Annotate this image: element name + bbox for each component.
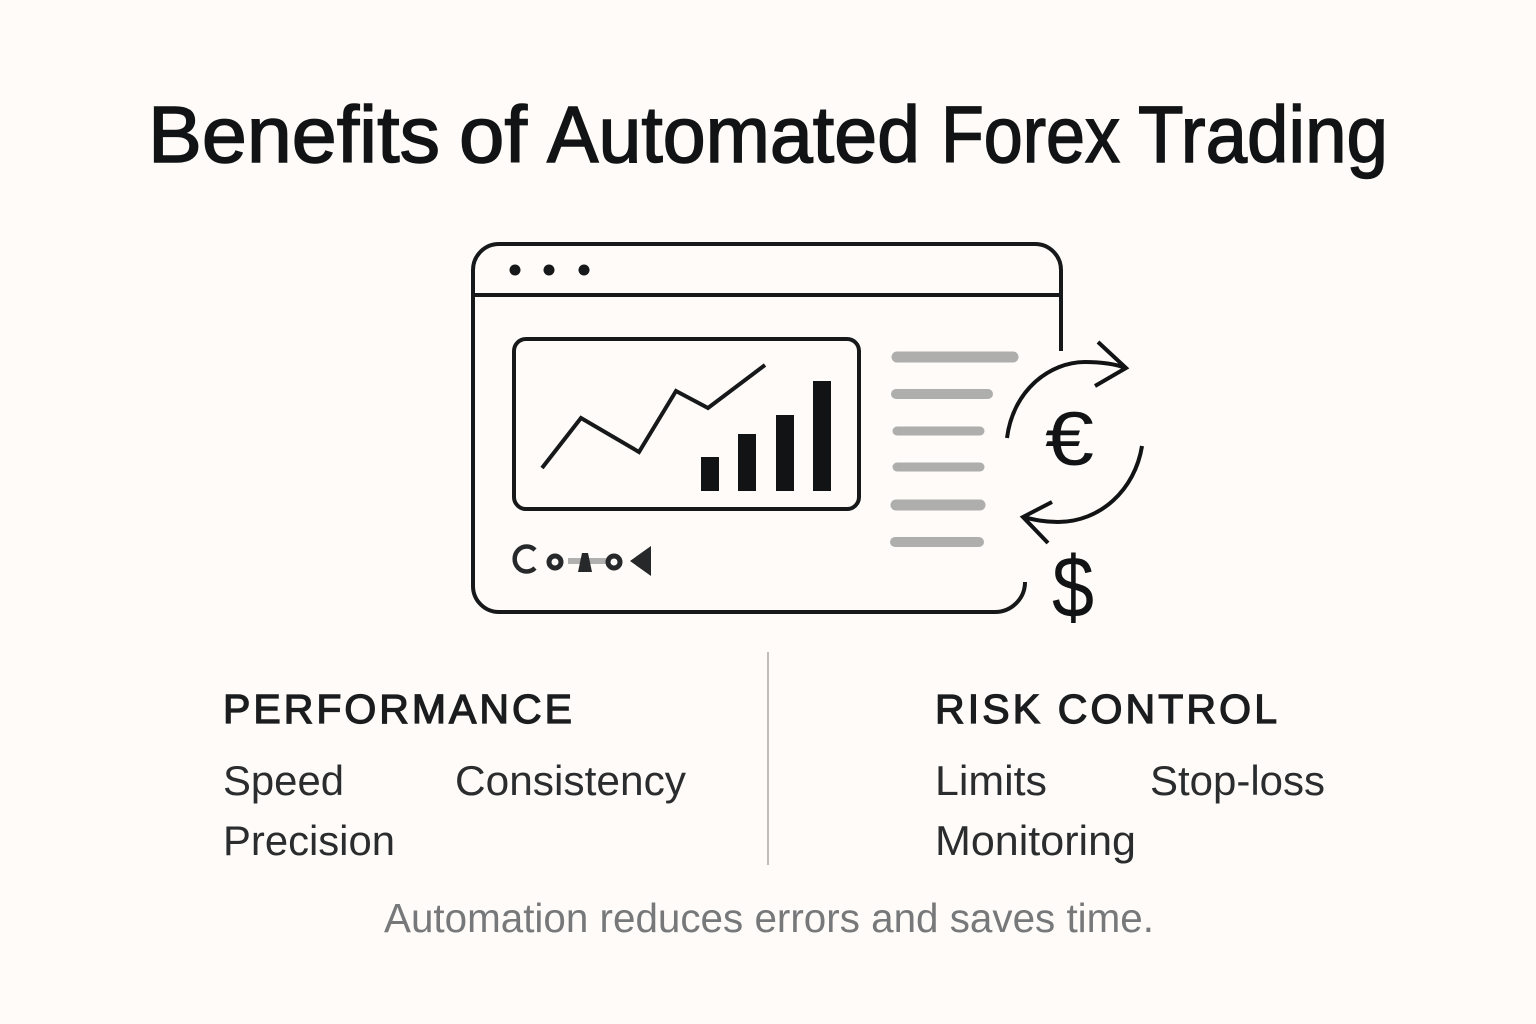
- item: monitoring: Monitoring: [935, 817, 1136, 864]
- illustration: trading dashboard window: [473, 244, 1061, 612]
- heading: performance: PERFORMANCE: [223, 686, 572, 732]
- chart panel: [514, 339, 859, 509]
- item: stop-loss: Stop-loss: [1150, 757, 1325, 804]
- title: [148, 90, 1388, 179]
- lower arrow: [1023, 446, 1142, 543]
- text placeholder lines: [895, 357, 1013, 542]
- title: Automated: [547, 90, 920, 179]
- line chart: [542, 365, 765, 468]
- item: consistency: Consistency: [455, 757, 686, 804]
- upper arrow: [1007, 342, 1126, 438]
- toolbar glyphs: [515, 546, 651, 576]
- dollar sign: $: [1052, 539, 1094, 636]
- title: Benefits: [148, 90, 440, 179]
- panel: risk control: [935, 686, 1325, 864]
- item: limits: Limits: [935, 757, 1047, 804]
- window title bar divider: [473, 293, 1061, 297]
- window control dots: [510, 264, 590, 276]
- vertical divider: [767, 652, 769, 865]
- title: of: [459, 90, 528, 179]
- item: speed: Speed: [223, 757, 344, 804]
- item: precision: Precision: [223, 817, 395, 864]
- browser window frame: [473, 244, 1061, 612]
- icon: currency exchange arrows: [1007, 342, 1142, 636]
- footer note: Automation reduces errors and saves time.: [384, 895, 1154, 941]
- panel: performance: [223, 686, 686, 864]
- euro sign: €: [1045, 397, 1094, 482]
- title: Trading: [1138, 90, 1388, 179]
- heading: risk control: RISK CONTROL: [935, 686, 1277, 732]
- bar chart: [701, 381, 831, 491]
- title: Forex: [941, 90, 1120, 179]
